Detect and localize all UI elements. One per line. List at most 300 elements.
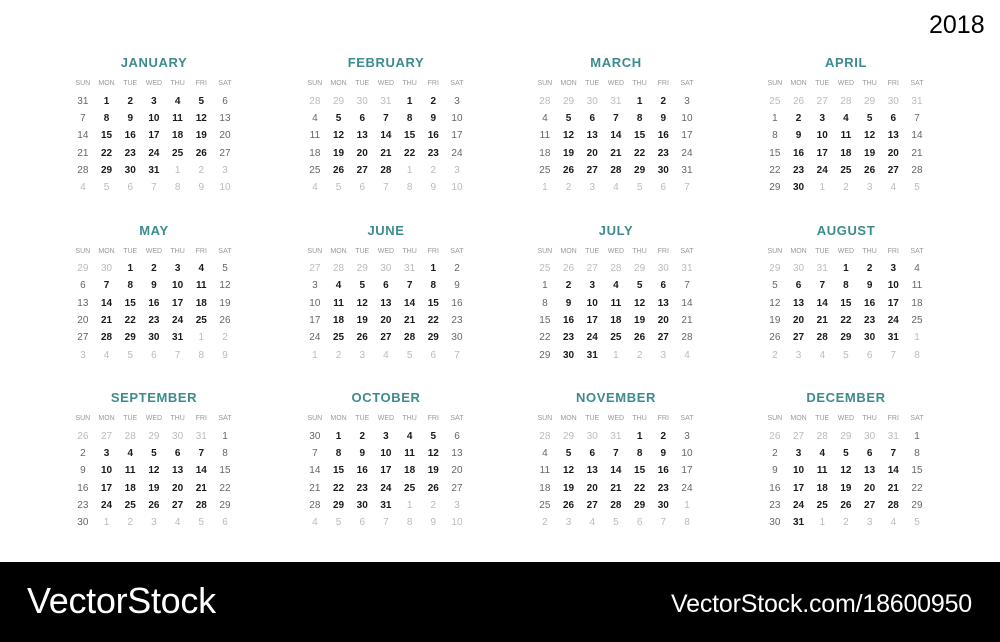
day grid: 7 bbox=[383, 517, 389, 528]
day grid: 6 bbox=[637, 517, 642, 528]
title: January: JANUARY bbox=[121, 55, 187, 70]
day grid: 26 bbox=[563, 165, 574, 176]
weekday header: FRI bbox=[658, 248, 669, 254]
weekday header: THU bbox=[632, 248, 647, 254]
day grid: 2 bbox=[336, 350, 341, 361]
day grid: 13 bbox=[864, 465, 875, 476]
day grid: 28 bbox=[309, 500, 320, 511]
weekday header: WED bbox=[838, 415, 854, 422]
day grid: 8 bbox=[407, 517, 412, 528]
day grid: 27 bbox=[357, 165, 368, 176]
day grid: 5 bbox=[566, 448, 571, 459]
day grid: 13 bbox=[658, 298, 669, 309]
day grid: 19 bbox=[148, 483, 159, 494]
day grid: 2 bbox=[843, 182, 849, 193]
panel: November bbox=[537, 390, 694, 528]
day grid: 8 bbox=[684, 517, 690, 528]
day grid: 19 bbox=[357, 315, 368, 326]
day grid: 16 bbox=[125, 130, 136, 141]
day grid: 12 bbox=[563, 465, 574, 476]
day grid: 27 bbox=[864, 500, 875, 511]
day grid: 25 bbox=[404, 483, 415, 494]
weekday header: MON bbox=[790, 248, 807, 254]
day grid: 28 bbox=[196, 500, 207, 511]
day grid: 2 bbox=[843, 517, 849, 528]
day grid: 4 bbox=[890, 517, 896, 528]
day grid: 30 bbox=[888, 96, 899, 106]
weekday header: SUN bbox=[767, 248, 782, 254]
day grid: 28 bbox=[380, 165, 391, 176]
day grid: 7 bbox=[151, 182, 157, 193]
day grid: 25 bbox=[196, 315, 207, 326]
day grid: 30 bbox=[769, 517, 780, 528]
weekday header: WED bbox=[838, 80, 854, 87]
day grid bbox=[309, 430, 463, 528]
day grid: 4 bbox=[312, 182, 318, 193]
day grid: 3 bbox=[151, 96, 157, 106]
day grid: 7 bbox=[613, 448, 619, 459]
day grid: 23 bbox=[357, 483, 368, 494]
weekday header: SAT bbox=[680, 248, 694, 254]
day grid: 5 bbox=[637, 182, 642, 193]
day grid: 29 bbox=[840, 332, 851, 343]
weekday header bbox=[75, 415, 232, 422]
day grid: 6 bbox=[175, 448, 180, 459]
day grid: 5 bbox=[637, 280, 642, 291]
day grid: 20 bbox=[864, 483, 875, 494]
day grid: 24 bbox=[309, 332, 320, 343]
day grid: 1 bbox=[222, 430, 228, 442]
weekday header: WED bbox=[378, 80, 394, 87]
day grid: 24 bbox=[681, 483, 693, 494]
day grid: 18 bbox=[309, 148, 320, 159]
day grid: 12 bbox=[634, 298, 645, 309]
day grid bbox=[539, 263, 693, 361]
weekday header: THU bbox=[402, 415, 417, 422]
weekday header: TUE bbox=[585, 415, 599, 422]
day grid: 29 bbox=[634, 165, 645, 176]
weekday header: WED bbox=[146, 415, 162, 422]
day grid: 28 bbox=[404, 332, 415, 343]
day grid: 19 bbox=[769, 315, 780, 326]
day grid: 11 bbox=[172, 113, 183, 124]
footer logo text: VectorStock bbox=[27, 580, 216, 621]
day grid: 14 bbox=[77, 130, 88, 141]
day grid: 30 bbox=[864, 332, 875, 343]
day grid: 8 bbox=[914, 350, 920, 361]
day grid: 4 bbox=[613, 182, 619, 193]
day grid: 21 bbox=[77, 148, 88, 159]
day grid: 3 bbox=[796, 448, 801, 459]
day grid: 31 bbox=[380, 96, 391, 106]
day grid: 26 bbox=[333, 165, 344, 176]
day grid: 12 bbox=[428, 448, 439, 459]
day grid: 25 bbox=[333, 332, 344, 343]
day grid: 26 bbox=[634, 332, 645, 343]
day grid: 18 bbox=[172, 130, 183, 141]
day grid: 29 bbox=[563, 430, 574, 442]
day grid: 17 bbox=[380, 465, 391, 476]
day grid: 9 bbox=[359, 448, 365, 459]
day grid: 12 bbox=[840, 465, 851, 476]
day grid: 20 bbox=[587, 483, 598, 494]
day grid: 22 bbox=[101, 148, 112, 159]
day grid: 2 bbox=[430, 500, 436, 511]
day grid: 28 bbox=[539, 96, 550, 106]
day grid: 28 bbox=[817, 332, 828, 343]
day grid: 8 bbox=[407, 113, 412, 124]
day grid: 22 bbox=[333, 483, 344, 494]
day grid: 10 bbox=[817, 130, 828, 141]
day grid bbox=[77, 96, 231, 193]
day grid: 19 bbox=[333, 148, 344, 159]
day grid: 31 bbox=[172, 332, 183, 343]
day grid: 27 bbox=[587, 500, 598, 511]
day grid: 7 bbox=[890, 448, 896, 459]
day grid: 31 bbox=[587, 350, 598, 361]
weekday header bbox=[307, 415, 464, 422]
weekday header: MON bbox=[330, 415, 347, 422]
day grid: 26 bbox=[148, 500, 159, 511]
day grid: 7 bbox=[684, 182, 690, 193]
weekday header: WED bbox=[378, 415, 394, 422]
weekday header: THU bbox=[170, 248, 185, 254]
day grid: 2 bbox=[454, 263, 460, 274]
day grid: 1 bbox=[407, 165, 412, 176]
day grid: 22 bbox=[840, 315, 851, 326]
day grid: 29 bbox=[125, 332, 136, 343]
day grid: 29 bbox=[563, 96, 574, 106]
day grid: 16 bbox=[148, 298, 159, 309]
day grid: 5 bbox=[151, 448, 157, 459]
day grid: 4 bbox=[383, 350, 389, 361]
day grid: 26 bbox=[793, 96, 804, 106]
day grid: 13 bbox=[219, 113, 231, 124]
day grid: 8 bbox=[198, 350, 204, 361]
day grid: 4 bbox=[312, 517, 318, 528]
day grid: 22 bbox=[634, 148, 645, 159]
day grid: 28 bbox=[125, 430, 136, 442]
day grid: 11 bbox=[540, 465, 550, 476]
day grid: 26 bbox=[769, 430, 780, 442]
day grid: 23 bbox=[769, 500, 780, 511]
day grid: 25 bbox=[125, 500, 136, 511]
weekday header: MON bbox=[98, 248, 115, 254]
day grid: 4 bbox=[80, 182, 86, 193]
day grid: 20 bbox=[888, 148, 899, 159]
weekday header: TUE bbox=[123, 248, 137, 254]
title: September: SEPTEMBER bbox=[111, 390, 197, 405]
day grid: 4 bbox=[819, 448, 825, 459]
day grid: 5 bbox=[359, 280, 365, 291]
day grid: 7 bbox=[613, 113, 619, 124]
weekday header: FRI bbox=[428, 415, 439, 422]
day grid: 4 bbox=[684, 350, 690, 361]
day grid: 10 bbox=[172, 280, 183, 291]
day grid: 25 bbox=[539, 500, 550, 511]
weekday header bbox=[767, 248, 924, 254]
day grid: 16 bbox=[658, 130, 669, 141]
day grid: 8 bbox=[222, 448, 228, 459]
day grid: 31 bbox=[610, 430, 621, 442]
day grid: 1 bbox=[198, 332, 204, 343]
day grid: 6 bbox=[660, 280, 666, 291]
day grid: 11 bbox=[912, 280, 922, 291]
day grid: 8 bbox=[127, 280, 133, 291]
day grid: 27 bbox=[380, 332, 391, 343]
day grid: 24 bbox=[101, 500, 112, 511]
day grid: 20 bbox=[77, 315, 88, 326]
day grid: 14 bbox=[380, 130, 391, 141]
day grid: 3 bbox=[796, 350, 801, 361]
day grid: 1 bbox=[336, 430, 341, 442]
day grid: 31 bbox=[404, 263, 415, 274]
day grid: 17 bbox=[888, 298, 899, 309]
day grid: 24 bbox=[681, 148, 693, 159]
day grid: 25 bbox=[309, 165, 320, 176]
day grid: 3 bbox=[80, 350, 86, 361]
day grid: 27 bbox=[793, 430, 804, 442]
weekday header: SAT bbox=[910, 80, 924, 87]
weekday header: FRI bbox=[196, 415, 207, 422]
day grid: 6 bbox=[454, 430, 460, 442]
day grid: 9 bbox=[566, 298, 571, 309]
day grid: 5 bbox=[867, 113, 872, 124]
day grid: 19 bbox=[840, 483, 851, 494]
day grid: 28 bbox=[309, 96, 320, 106]
weekday header: WED bbox=[608, 415, 624, 422]
day grid: 15 bbox=[333, 465, 344, 476]
day grid bbox=[309, 263, 463, 361]
weekday header: TUE bbox=[355, 415, 369, 422]
day grid: 1 bbox=[104, 517, 109, 528]
day grid: 31 bbox=[380, 500, 391, 511]
weekday header: MON bbox=[560, 80, 577, 87]
day grid: 1 bbox=[407, 500, 412, 511]
day grid: 5 bbox=[336, 113, 341, 124]
day grid: 16 bbox=[357, 465, 368, 476]
day grid: 31 bbox=[793, 517, 804, 528]
footer url: VectorStock.com/18600950 bbox=[671, 590, 972, 618]
day grid: 4 bbox=[312, 113, 318, 124]
day grid: 15 bbox=[911, 465, 923, 476]
day grid: 19 bbox=[563, 148, 574, 159]
day grid: 23 bbox=[451, 315, 463, 326]
day grid: 19 bbox=[563, 483, 574, 494]
day grid: 2 bbox=[660, 96, 666, 106]
weekday header: SUN bbox=[307, 248, 322, 254]
weekday header: WED bbox=[608, 80, 624, 87]
day grid: 18 bbox=[125, 483, 136, 494]
day grid: 19 bbox=[634, 315, 645, 326]
day grid: 10 bbox=[451, 113, 463, 124]
day grid: 25 bbox=[172, 148, 183, 159]
day grid: 6 bbox=[359, 113, 365, 124]
weekday header: TUE bbox=[815, 80, 829, 87]
day grid: 3 bbox=[454, 500, 460, 511]
panel: January bbox=[75, 55, 232, 193]
day grid: 28 bbox=[681, 332, 693, 343]
day grid: 2 bbox=[222, 332, 228, 343]
day grid: 23 bbox=[428, 148, 439, 159]
day grid: 15 bbox=[125, 298, 136, 309]
day grid: 21 bbox=[404, 315, 415, 326]
day grid: 24 bbox=[587, 332, 598, 343]
day grid: 14 bbox=[309, 465, 320, 476]
day grid: 2 bbox=[198, 165, 204, 176]
weekday header: MON bbox=[98, 80, 115, 87]
day grid: 14 bbox=[610, 130, 621, 141]
day grid: 27 bbox=[101, 430, 112, 442]
day grid: 2 bbox=[430, 96, 436, 106]
day grid: 10 bbox=[219, 182, 231, 193]
day grid: 7 bbox=[407, 280, 412, 291]
day grid: 30 bbox=[357, 96, 368, 106]
day grid: 16 bbox=[864, 298, 875, 309]
day grid: 11 bbox=[611, 298, 621, 309]
day grid: 29 bbox=[219, 500, 231, 511]
day grid: 6 bbox=[890, 113, 896, 124]
weekday header bbox=[75, 80, 232, 87]
day grid: 31 bbox=[888, 332, 899, 343]
title: October: OCTOBER bbox=[352, 390, 420, 405]
weekday header: SUN bbox=[537, 248, 552, 254]
day grid: 5 bbox=[914, 517, 920, 528]
day grid: 2 bbox=[566, 182, 571, 193]
day grid: 29 bbox=[634, 500, 645, 511]
weekday header: SAT bbox=[450, 80, 464, 87]
day grid: 30 bbox=[380, 263, 391, 274]
weekday header: THU bbox=[862, 415, 877, 422]
panel: September bbox=[75, 390, 232, 528]
day grid: 21 bbox=[911, 148, 923, 159]
day grid: 11 bbox=[196, 280, 207, 291]
day grid: 2 bbox=[637, 350, 642, 361]
day grid: 21 bbox=[610, 483, 621, 494]
day grid: 16 bbox=[793, 148, 804, 159]
day grid: 28 bbox=[888, 500, 899, 511]
day grid: 2 bbox=[772, 448, 778, 459]
day grid: 13 bbox=[357, 130, 368, 141]
day grid: 6 bbox=[222, 96, 228, 106]
day grid: 3 bbox=[867, 182, 872, 193]
day grid: 22 bbox=[911, 483, 923, 494]
day grid: 3 bbox=[589, 182, 595, 193]
day grid: 9 bbox=[454, 280, 460, 291]
day grid: 6 bbox=[589, 448, 595, 459]
day grid: 26 bbox=[864, 165, 875, 176]
day grid: 11 bbox=[333, 298, 344, 309]
day grid: 20 bbox=[658, 315, 669, 326]
weekday header bbox=[537, 80, 694, 87]
day grid: 29 bbox=[911, 500, 923, 511]
day grid: 19 bbox=[219, 298, 231, 309]
day grid: 3 bbox=[589, 280, 595, 291]
day grid: 10 bbox=[451, 517, 463, 528]
day grid: 9 bbox=[80, 465, 86, 476]
day grid bbox=[769, 263, 923, 361]
weekday header: FRI bbox=[428, 80, 439, 87]
day grid: 31 bbox=[681, 165, 693, 176]
day grid: 4 bbox=[589, 517, 595, 528]
day grid: 5 bbox=[566, 113, 571, 124]
day grid: 1 bbox=[104, 96, 109, 106]
day grid: 1 bbox=[613, 350, 619, 361]
day grid: 23 bbox=[148, 315, 159, 326]
day grid: 2 bbox=[151, 263, 157, 274]
weekday header: THU bbox=[632, 415, 647, 422]
year label: 2018 bbox=[929, 11, 985, 39]
weekday header: TUE bbox=[585, 248, 599, 254]
day grid: 2 bbox=[127, 517, 133, 528]
day grid: 23 bbox=[864, 315, 875, 326]
day grid: 29 bbox=[769, 263, 780, 274]
day grid: 4 bbox=[198, 263, 204, 274]
day grid: 14 bbox=[888, 465, 899, 476]
day grid: 31 bbox=[681, 263, 693, 274]
day grid: 30 bbox=[357, 500, 368, 511]
day grid: 10 bbox=[681, 448, 693, 459]
day grid: 3 bbox=[890, 263, 896, 274]
day grid: 8 bbox=[772, 130, 778, 141]
title: February: FEBRUARY bbox=[348, 55, 424, 70]
panel: March bbox=[537, 55, 694, 193]
day grid: 28 bbox=[610, 263, 621, 274]
day grid: 15 bbox=[219, 465, 231, 476]
day grid: 23 bbox=[77, 500, 88, 511]
day grid: 5 bbox=[843, 350, 849, 361]
day grid: 8 bbox=[104, 113, 109, 124]
day grid: 29 bbox=[539, 350, 550, 361]
day grid: 21 bbox=[888, 483, 899, 494]
day grid: 25 bbox=[840, 165, 851, 176]
panel: October bbox=[307, 390, 464, 528]
day grid: 27 bbox=[658, 332, 669, 343]
day grid: 24 bbox=[148, 148, 159, 159]
day grid: 29 bbox=[864, 96, 875, 106]
title: June: JUNE bbox=[367, 222, 405, 238]
footer bar bbox=[0, 562, 1000, 642]
day grid: 28 bbox=[610, 165, 621, 176]
weekday header: THU bbox=[402, 248, 417, 254]
day grid: 21 bbox=[309, 483, 320, 494]
day grid: 24 bbox=[172, 315, 183, 326]
weekday header: MON bbox=[330, 80, 347, 87]
weekday header: WED bbox=[146, 248, 162, 254]
day grid: 6 bbox=[383, 280, 389, 291]
day grid: 7 bbox=[684, 280, 690, 291]
day grid: 26 bbox=[769, 332, 780, 343]
day grid: 8 bbox=[914, 448, 920, 459]
day grid: 18 bbox=[539, 148, 550, 159]
day grid: 10 bbox=[681, 113, 693, 124]
day grid: 3 bbox=[867, 517, 872, 528]
day grid: 5 bbox=[772, 280, 778, 291]
day grid: 11 bbox=[817, 465, 828, 476]
weekday header: WED bbox=[838, 248, 854, 254]
weekday header: SUN bbox=[767, 80, 782, 87]
day grid: 7 bbox=[312, 448, 318, 459]
day grid: 6 bbox=[867, 350, 872, 361]
weekday header: SUN bbox=[75, 80, 90, 87]
weekday header: SAT bbox=[218, 415, 232, 422]
day grid: 9 bbox=[430, 517, 436, 528]
day grid: 20 bbox=[793, 315, 804, 326]
day grid: 24 bbox=[888, 315, 899, 326]
day grid: 26 bbox=[357, 332, 368, 343]
day grid: 5 bbox=[914, 182, 920, 193]
day grid: 9 bbox=[867, 280, 872, 291]
